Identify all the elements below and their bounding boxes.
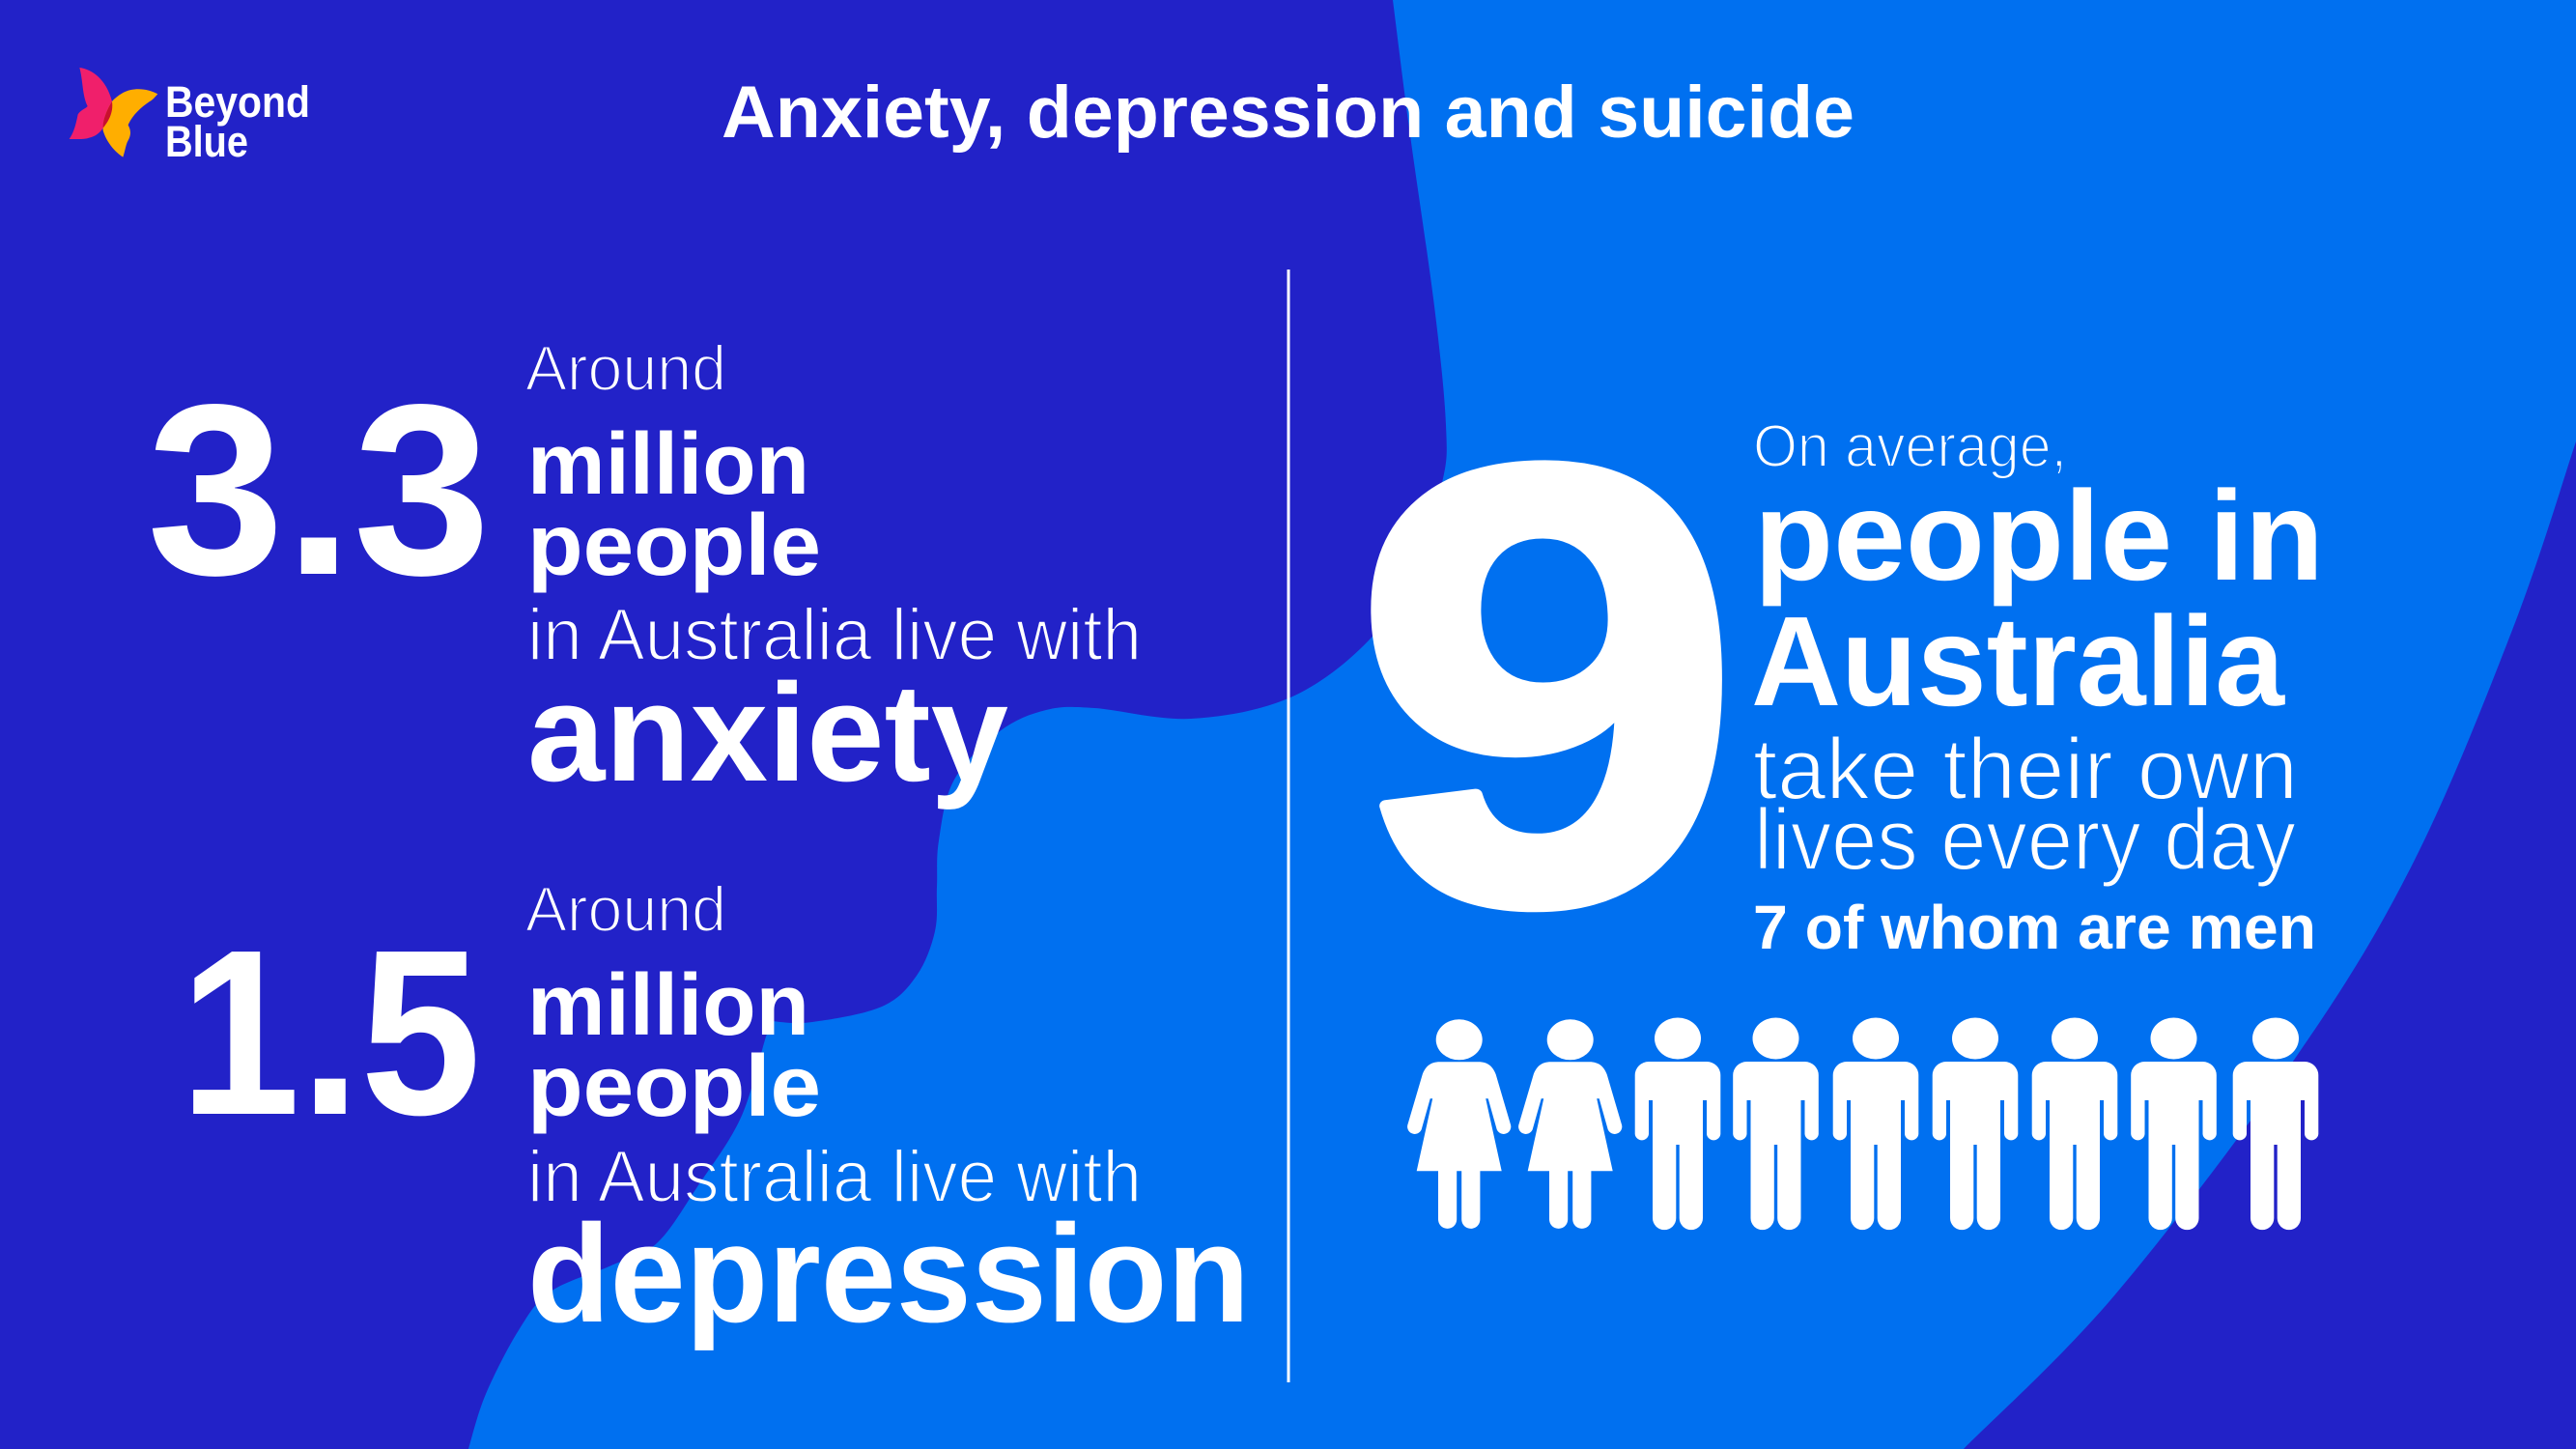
text: take their own: take their own — [1753, 722, 2298, 818]
logo wordmark: Blue — [165, 117, 248, 166]
text: depression: depression — [527, 1196, 1250, 1351]
icon: woman 1 — [1407, 1019, 1511, 1229]
icon: man 1 — [1635, 1018, 1720, 1230]
icon: woman 2 — [1518, 1019, 1622, 1229]
panel: depression statistic — [180, 873, 1250, 1351]
text: Australia: Australia — [1751, 590, 2286, 732]
pictogram: nine people — [1407, 1018, 2318, 1230]
text: people: people — [527, 1038, 821, 1135]
logo: Beyond Blue — [70, 68, 310, 166]
text: in Australia live with: in Australia live with — [527, 594, 1142, 676]
panel: suicide statistic — [1353, 338, 2324, 1033]
vertical divider — [1287, 270, 1290, 1382]
text: million: million — [527, 957, 809, 1054]
text: On average,: On average, — [1753, 413, 2067, 480]
icon: man 7 — [2233, 1018, 2318, 1230]
logo wordmark: Beyond — [165, 77, 310, 127]
number: 1.5: 1.5 — [180, 900, 481, 1164]
icon: man 6 — [2131, 1018, 2217, 1230]
text: Around: Around — [525, 873, 726, 945]
text: people: people — [527, 497, 821, 594]
title: Anxiety, depression and suicide — [722, 71, 1854, 154]
text: Around: Around — [525, 332, 726, 404]
text: anxiety: anxiety — [527, 655, 1008, 810]
number: 3.3: 3.3 — [147, 355, 491, 626]
icon: man 5 — [2032, 1018, 2117, 1230]
number: 9: 9 — [1353, 338, 1741, 1033]
panel: anxiety statistic — [147, 332, 1142, 810]
text: people in: people in — [1754, 465, 2324, 607]
text: 7 of whom are men: 7 of whom are men — [1753, 893, 2316, 962]
icon: man 3 — [1833, 1018, 1918, 1230]
text: million: million — [527, 416, 809, 513]
icon: man 2 — [1733, 1018, 1819, 1230]
icon: butterfly — [70, 68, 157, 157]
logo wordmark — [165, 77, 310, 166]
text: in Australia live with: in Australia live with — [527, 1136, 1142, 1218]
text: lives every day: lives every day — [1754, 792, 2296, 889]
icon: man 4 — [1933, 1018, 2018, 1230]
